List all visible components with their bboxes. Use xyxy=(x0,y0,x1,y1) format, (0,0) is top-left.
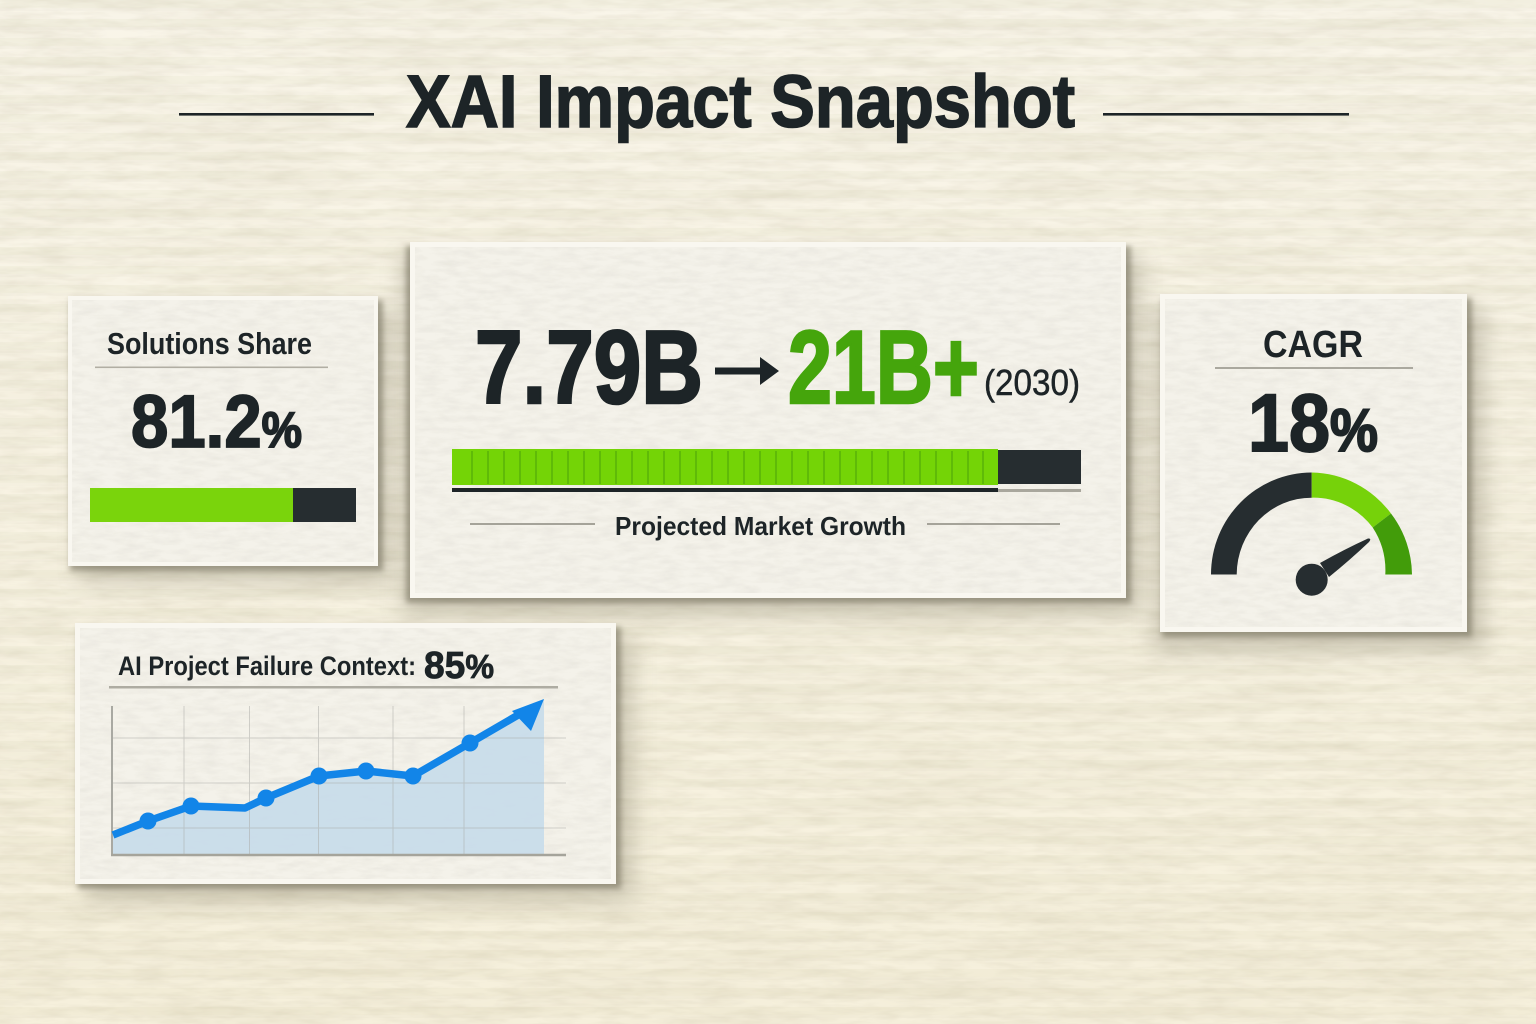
area fill xyxy=(112,699,544,854)
value: 81.2% xyxy=(131,380,302,463)
title text: XAI Impact Snapshot xyxy=(406,60,1075,143)
start value: 7.79B xyxy=(475,310,703,426)
card background xyxy=(75,623,616,884)
year: (2030) xyxy=(984,362,1080,403)
caption: Projected Market Growth xyxy=(615,511,906,541)
panel: solutions share xyxy=(68,296,378,566)
panel: AI project failure xyxy=(75,623,616,884)
value: 18% xyxy=(1248,378,1378,469)
heading: AI Project Failure Context: xyxy=(118,651,416,681)
panel: projected market growth xyxy=(410,242,1126,598)
arrow xyxy=(715,357,779,385)
gauge xyxy=(1211,472,1412,596)
trend line xyxy=(113,711,525,835)
title rule left xyxy=(179,113,374,116)
arrowhead xyxy=(512,699,544,731)
title rule right xyxy=(1103,113,1349,116)
card background xyxy=(68,296,378,566)
heading: CAGR xyxy=(1263,324,1363,366)
gauge needle xyxy=(1296,538,1370,596)
value: 85% xyxy=(424,645,494,687)
heading: Solutions Share xyxy=(107,326,312,361)
data points xyxy=(140,734,478,830)
line chart xyxy=(111,699,566,855)
card background xyxy=(1160,294,1467,632)
progress bar xyxy=(90,488,356,522)
grid xyxy=(112,706,566,854)
end value: 21B+ xyxy=(788,310,979,426)
panel: CAGR xyxy=(1160,294,1467,632)
growth bar xyxy=(452,449,1081,492)
card background xyxy=(410,242,1126,598)
